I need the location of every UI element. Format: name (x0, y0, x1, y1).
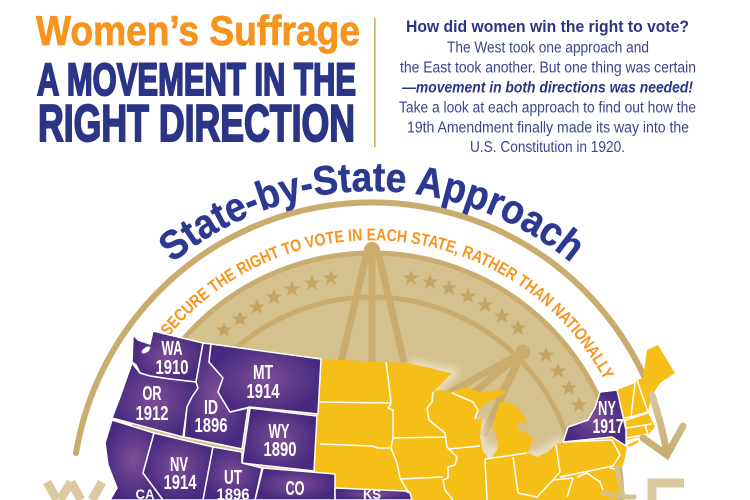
map: state borders (320, 362, 652, 500)
map: state labels: 1890 (264, 439, 296, 461)
map: state labels: ID (204, 397, 218, 419)
lake shore glow (410, 364, 563, 460)
state: Kansas (335, 488, 412, 500)
map: state labels: 1896 (194, 415, 228, 437)
map: state labels: 1917 (592, 416, 624, 438)
map: state labels (136, 338, 624, 500)
new england (617, 345, 675, 440)
map: state labels: UT (224, 467, 242, 489)
curved subtitle: SECURE THE RIGHT TO VOTE IN EACH STATE, RATHER THAN NATIONALLY (161, 228, 615, 378)
map: state labels: WY (268, 421, 290, 443)
intro text block: Take a look at each approach to find out how the (399, 100, 696, 116)
arrow: east coast arc (643, 395, 683, 455)
intro text block: the East took another. But one thing was certain (400, 60, 696, 76)
map: state labels: OR (142, 383, 162, 405)
intro text block: How did women win the right to vote? (406, 17, 689, 36)
state: California (105, 420, 163, 500)
map: state labels: WA (162, 338, 182, 360)
divider (374, 18, 376, 147)
heading: A Movement in the: A MOVEMENT IN THE (37, 54, 356, 105)
long island (627, 440, 639, 447)
map: purple states (105, 331, 626, 500)
state: Utah (203, 447, 262, 500)
state: Idaho (184, 343, 248, 449)
state: Colorado (255, 468, 335, 500)
map: state labels: CO (286, 478, 304, 500)
big letter: W (47, 482, 102, 500)
intro text block: 19th Amendment finally made its way into the (407, 120, 689, 136)
intro text block (399, 17, 696, 156)
map: state labels: 1914 (164, 472, 197, 494)
map: yellow states (314, 345, 675, 500)
state: Oregon (112, 363, 198, 437)
state: Montana (209, 344, 321, 414)
map: state labels: 1914 (246, 381, 280, 403)
state: Washington (132, 331, 203, 382)
map: state labels: NY (598, 398, 616, 420)
big letter: E (652, 483, 684, 500)
arrow: lower coast (604, 468, 634, 497)
heading: Women's Suffrage: Women’s Suffrage (36, 7, 360, 54)
dome disc with spokes and stars (122, 242, 622, 500)
curved heading: State-by-State Approach: State-by-State Approach (160, 164, 580, 262)
intro text block: The West took one approach and (447, 40, 649, 56)
map: state labels: NV (170, 454, 188, 476)
state: Nevada (143, 433, 213, 500)
heading: Right Direction: RIGHT DIRECTION (38, 95, 355, 153)
intro text block: U.S. Constitution in 1920. (470, 139, 625, 156)
intro text block: —movement in both directions was needed! (401, 80, 693, 96)
state: Wyoming (242, 408, 317, 471)
map: state labels: MT (253, 362, 273, 384)
outer dome arc (76, 202, 652, 453)
state: New York (563, 390, 626, 446)
puget sound (140, 345, 152, 355)
map: state labels: 1912 (136, 403, 168, 425)
map: state labels: 1910 (156, 357, 188, 379)
